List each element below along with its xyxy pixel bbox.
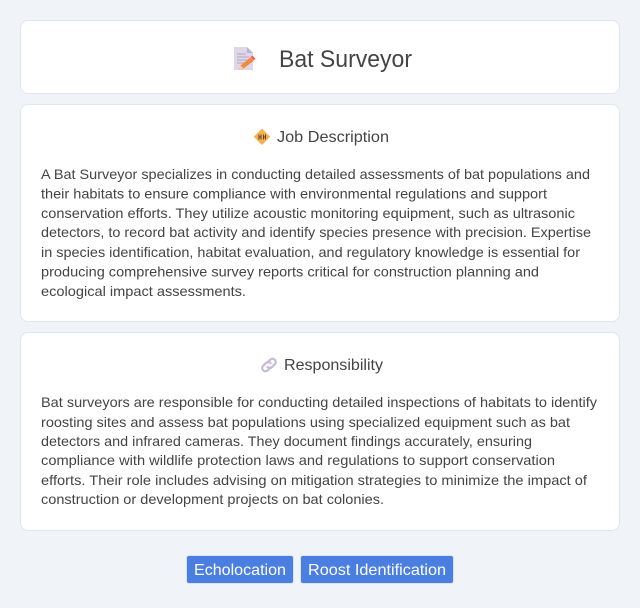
text block: responsibility: compliance with wildlife protection laws and regulations to support conservation xyxy=(41,452,555,468)
text block: responsibility: Bat surveyors are responsible for conducting detailed inspections of habitats to identify xyxy=(41,394,597,410)
text block: job description: detectors, to record bat activity and identify species presence with precision. Expertise xyxy=(41,224,591,240)
text block: responsibility: roosting sites and assess bat populations using specialized equipment such as bat xyxy=(41,414,570,430)
text block: job description xyxy=(41,166,591,299)
tag: echolocation: Echolocation xyxy=(194,562,286,579)
icon: orange diamond sign xyxy=(254,128,270,145)
tag: roost identification: Roost Identification xyxy=(308,562,446,579)
text block: job description: A Bat Surveyor specializes in conducting detailed assessments of bat populations and xyxy=(41,166,590,182)
text block: job description: conservation efforts. They utilize acoustic monitoring equipment, such as ultrasonic xyxy=(41,205,575,221)
text block: job description: their habitats to ensure compliance with environmental regulations and support xyxy=(41,186,547,202)
text block: responsibility: efforts. Their role includes advising on mitigation strategies to minimize the impact of xyxy=(41,472,587,488)
panel: job description xyxy=(20,104,620,322)
heading: job description: Job Description xyxy=(277,129,389,146)
text block: responsibility: construction or development projects on bat colonies. xyxy=(41,491,384,507)
text block: job description: ecological impact assessments. xyxy=(41,283,246,299)
panel: responsibility xyxy=(20,332,620,531)
icon: memo with pencil xyxy=(234,47,256,70)
tag: roost identification xyxy=(300,555,454,584)
text block: responsibility: detectors and infrared cameras. They document findings accurately, ensuring xyxy=(41,433,532,449)
text block: responsibility xyxy=(41,394,597,507)
icon: chain link xyxy=(261,358,277,372)
tag: echolocation xyxy=(186,555,294,584)
text block: job description: in species identification, habitat evaluation, and regulatory knowledge is essential for xyxy=(41,244,580,260)
heading: responsibility: Responsibility xyxy=(284,357,383,374)
panel: title header xyxy=(20,20,620,94)
title: Bat Surveyor xyxy=(279,46,412,73)
text block: job description: producing comprehensive survey reports critical for construction planning and xyxy=(41,264,539,280)
